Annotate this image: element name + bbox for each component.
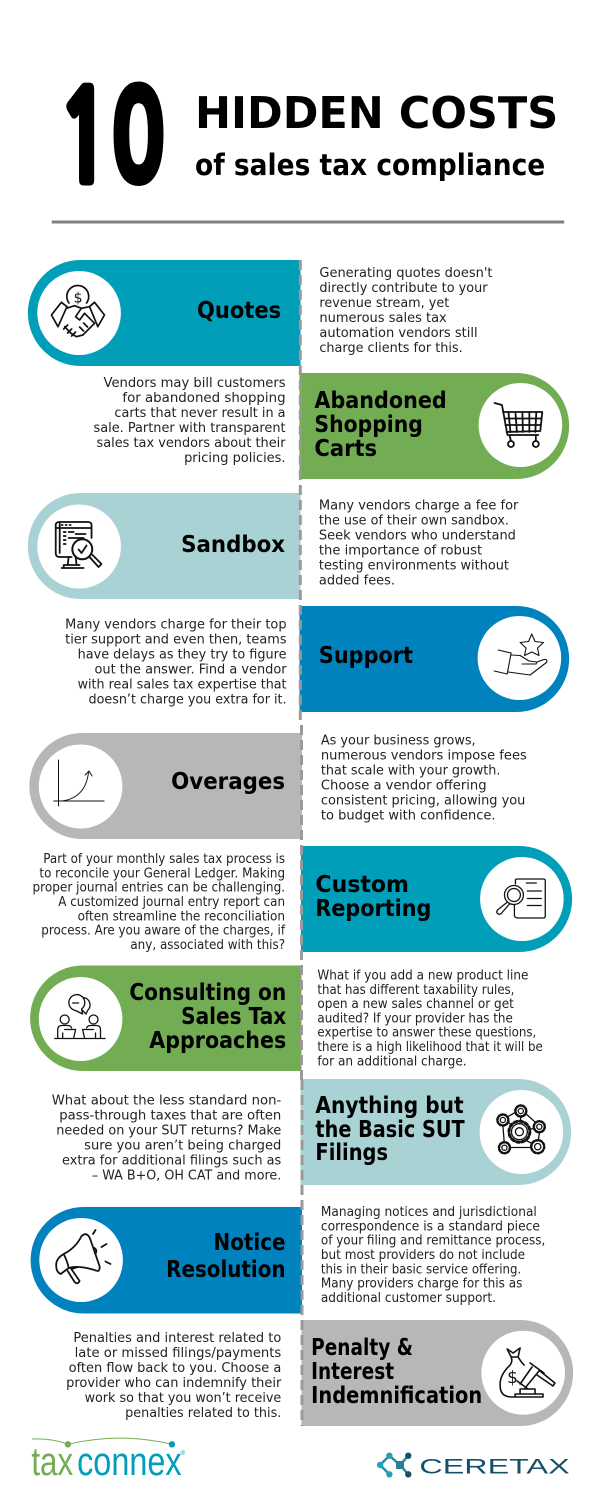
text: notice resolution description: correspondence is a standard piece [321,1219,540,1234]
heading: notice resolution [166,1230,286,1283]
text: sandbox description: Many vendors charge a fee for [319,498,519,514]
panel: anything but the basic SUT filings [300,1079,571,1185]
panel: notice resolution [31,1207,302,1314]
icon: two people consulting [55,995,105,1038]
logo: taxconnex: ® [181,1450,186,1457]
text: abandoned carts description: sale. Partner with transparent [94,421,286,436]
heading: custom reporting: Reporting [315,896,431,922]
panel: overages [29,733,302,839]
heading: consulting on sales tax approaches: Sales Tax [181,1004,286,1030]
heading: notice resolution: Notice [214,1230,286,1256]
icon: handshake with dollar coin [51,285,104,337]
text: consulting description: there is a high likelihood that it will be [317,1040,543,1055]
heading: support: Support [319,643,413,669]
text: consulting description: audited? If your provider has the [317,1011,513,1026]
text: abandoned carts description [94,376,286,466]
text: anything but description [52,1093,282,1184]
logo: taxconnex [31,1438,186,1484]
text: quotes description: revenue stream, yet [319,296,449,311]
text: anything but description: – WA B+O, OH CAT and more. [92,1168,281,1184]
heading: notice resolution: Resolution [166,1257,286,1283]
text: consulting description [317,968,543,1069]
text: penalty description: often flow back to you. Choose a [69,1361,281,1376]
text: penalty description: late or missed filings/payments [75,1346,282,1361]
text: anything but description: What about the less standard non- [52,1093,282,1109]
text: abandoned carts description: carts that never result in a [114,406,286,421]
text: notice resolution description: Managing notices and jurisdictional [321,1205,537,1220]
heading: quotes: Quotes [197,298,281,324]
text: anything but description: pass-through taxes that are often [59,1108,281,1124]
text: anything but description: needed on your SUT returns? Make [56,1123,281,1139]
text: sandbox description: Seek vendors who understand [319,528,516,544]
text: consulting description: What if you add a new product line [317,968,528,984]
icon: monitor with magnifier [56,522,101,568]
panel: penalty and interest indemnification [301,1320,573,1426]
text: penalty description: provider who can indemnify their [66,1376,282,1391]
text: abandoned carts description: Vendors may bill customers [103,376,286,391]
text: penalty description: Penalties and interest related to [73,1331,281,1346]
heading: anything but the basic SUT filings: Filings [315,1140,388,1166]
heading: overages: Overages [171,769,285,795]
text: notice resolution description: of your filing and remittance process, [321,1234,545,1249]
text: custom reporting description: Part of your monthly sales tax process is [43,852,285,867]
text: consulting description: expertise to answer these questions, [317,1026,536,1041]
text: custom reporting description: any, associated with this? [130,938,285,953]
panel: custom reporting [301,846,572,952]
text: penalty description [66,1331,282,1421]
text: support description: tier support and even then, teams [65,632,287,648]
text: support description: have delays as they try to figure [78,647,287,663]
icon: megaphone [56,1230,110,1283]
text: anything but description: extra for additional filings such as [62,1153,282,1169]
text: sandbox description [319,498,519,589]
panel: support [300,606,569,712]
text: overages description [321,733,527,824]
text: support description [65,617,287,708]
text: sandbox description: the use of their own sandbox. [319,513,509,529]
heading: sandbox: Sandbox [181,532,285,558]
text: overages description: As your business grows, [321,733,476,749]
text: abandoned carts description: pricing policies. [184,451,286,466]
icon: money bag and gavel: $ [507,1367,518,1387]
text: support description: with real sales tax expertise that [78,677,287,693]
text: quotes description: numerous sales tax [319,311,447,326]
text: custom reporting description [33,852,285,953]
logo: taxconnex: tax [31,1440,73,1484]
text: overages description: numerous vendors impose fees [321,748,527,764]
heading: anything but the basic SUT filings [315,1093,465,1166]
heading: penalty and interest indemnification: Penalty & [311,1335,413,1361]
text: consulting description: for an additional charge. [317,1054,467,1069]
logo: ceretax: CERETAX [419,1454,570,1479]
heading: penalty and interest indemnification [311,1335,482,1409]
heading: anything but the basic SUT filings: Anything but [315,1093,464,1119]
heading: custom reporting: Custom [315,872,409,898]
text: quotes description: directly contribute to your [319,281,488,296]
heading: abandoned shopping carts: Carts [314,436,377,462]
text: support description: Many vendors charge for their top [65,617,287,633]
title [58,76,558,200]
text: sandbox description: added fees. [319,573,395,589]
heading: abandoned shopping carts [314,388,447,462]
text: abandoned carts description: for abandoned shopping [122,391,286,406]
text: quotes description: charge clients for this. [319,341,463,356]
text: sandbox description: testing environments without [319,558,509,574]
heading: abandoned shopping carts: Abandoned [314,388,447,414]
icon: money bag and gavel [500,1348,555,1397]
heading: abandoned shopping carts: Shopping [314,412,423,438]
text: custom reporting description: proper journal entries can be challenging. [33,881,285,896]
text: support description: out the answer. Find a vendor [95,662,287,678]
text: custom reporting description: often streamline the reconciliation [78,909,285,924]
icon: growth curve chart [54,760,104,806]
heading: anything but the basic SUT filings: the Basic SUT [315,1117,465,1143]
text: notice resolution description: but most providers do not include [321,1248,525,1263]
text: custom reporting description: to reconcile your General Ledger. Making [39,866,285,881]
text: notice resolution description [321,1205,545,1306]
text: custom reporting description: process. Are you aware of the charges, if [41,924,285,939]
text: quotes description: Generating quotes doesn't [319,266,493,281]
text: sandbox description: the importance of robust [319,543,482,559]
text: quotes description: automation vendors still [319,326,478,341]
text: notice resolution description: Many providers charge for this as [321,1277,523,1292]
text: overages description: to budget with confidence. [321,808,496,824]
panel: sandbox [28,493,300,599]
heading: penalty and interest indemnification: Indemnification [311,1383,482,1409]
text: support description: doesn’t charge you extra for it. [89,692,287,708]
panel: consulting on sales tax approaches [30,966,301,1071]
text: notice resolution description: additional customer support. [321,1291,496,1306]
text: quotes description [319,266,493,356]
logo: taxconnex: connex [77,1440,182,1484]
subheading: of sales tax compliance [195,148,545,182]
text: overages description: consistent pricing, allowing you [321,793,525,809]
icon: connected gears [497,1106,545,1153]
big number 10: 10 [58,76,165,200]
text: anything but description: sure you aren’t being charged [84,1138,281,1154]
heading: consulting on sales tax approaches: Approaches [149,1028,286,1054]
text: penalty description: work so that you won’t receive [85,1391,281,1406]
text: notice resolution description: this in their basic service offering. [321,1262,521,1277]
text: penalty description: penalties related to this. [125,1406,281,1421]
icon: document with magnifier [497,879,545,918]
icon: handshake with dollar coin: $ [74,290,83,307]
text: consulting description: that has different taxability rules, [317,983,514,998]
logo: ceretax [377,1452,570,1479]
text: overages description: Choose a vendor offering [321,778,487,794]
text: abandoned carts description: sales tax vendors about their [97,436,286,451]
panel: abandoned shopping carts [300,373,569,479]
heading: consulting on sales tax approaches [129,980,286,1054]
panel: quotes [28,260,300,366]
text: consulting description: open a new sales channel or get [317,997,514,1012]
heading: custom reporting [315,872,431,922]
text: overages description: that scale with your growth. [321,763,500,779]
icon: shopping cart [495,403,542,447]
text: custom reporting description: A customized journal entry report can [58,895,285,910]
icon: hand with star [494,634,547,675]
heading: hidden costs: HIDDEN COSTS [195,88,558,139]
heading: penalty and interest indemnification: Interest [311,1359,394,1385]
heading: consulting on sales tax approaches: Consulting on [129,980,286,1006]
